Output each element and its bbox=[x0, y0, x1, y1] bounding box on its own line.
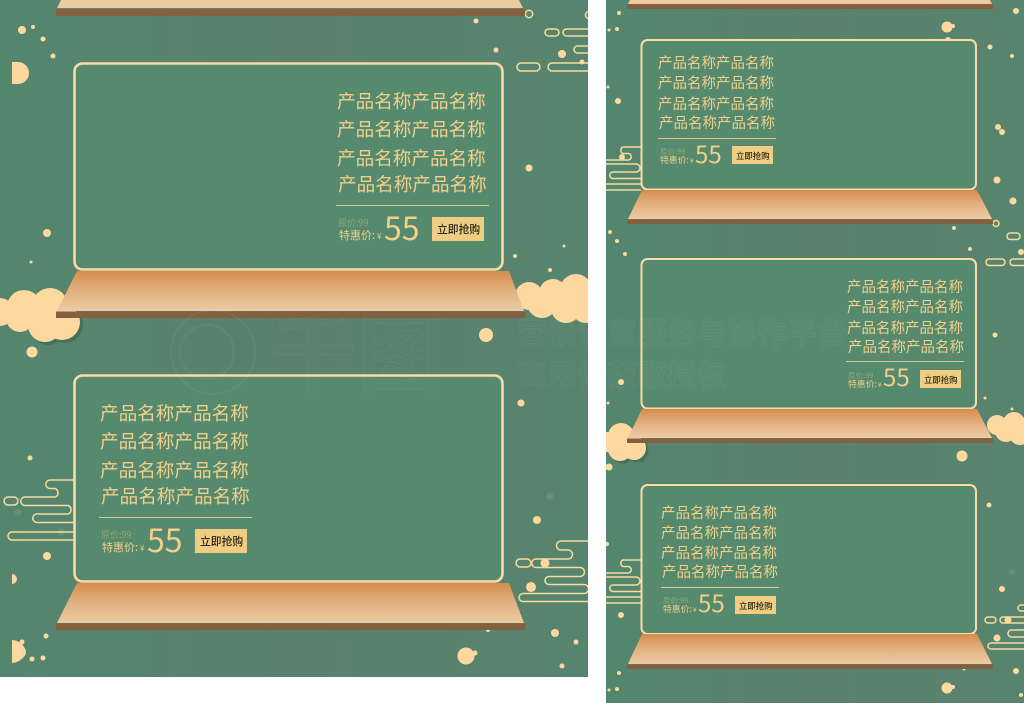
buy button: 立即抢购 bbox=[736, 150, 770, 162]
buy button: 立即抢购 bbox=[739, 600, 772, 612]
price bbox=[338, 204, 420, 250]
price: 55 bbox=[147, 516, 183, 562]
product panel: left poster upper bbox=[74, 64, 502, 270]
shelf: left poster bottom bbox=[56, 583, 525, 630]
left poster background bbox=[0, 0, 588, 677]
product panel: right poster lower bbox=[642, 485, 976, 634]
cloud: left poster right bbox=[516, 274, 588, 323]
product name: 产品名称产品名称 bbox=[100, 456, 249, 483]
price: 特惠价: bbox=[339, 227, 375, 243]
shelf: right poster bottom bbox=[627, 634, 993, 669]
price: ¥ bbox=[140, 543, 145, 554]
price: 原价:99 bbox=[660, 146, 685, 157]
buy button: 立即抢购 bbox=[200, 533, 243, 549]
cloud lines: right poster upper right bbox=[986, 220, 1024, 266]
product name: 产品名称产品名称 bbox=[661, 542, 777, 563]
product name: 产品名称产品名称 bbox=[658, 52, 774, 73]
price bbox=[660, 135, 722, 170]
watermark bbox=[171, 284, 847, 409]
product name: 产品名称产品名称 bbox=[662, 561, 778, 582]
price bbox=[101, 516, 183, 562]
price: 原价:99 bbox=[663, 595, 688, 606]
buy button bbox=[195, 529, 247, 553]
price: 特惠价: bbox=[660, 153, 689, 166]
product panel: left poster lower bbox=[74, 376, 502, 582]
cloud: right poster right bbox=[987, 412, 1024, 445]
product name: 产品名称产品名称 bbox=[101, 482, 250, 509]
cloud lines: right poster lower right bbox=[985, 605, 1024, 649]
watermark: 商用请获取授权 bbox=[517, 351, 727, 395]
product name bbox=[337, 87, 487, 197]
product name: 产品名称产品名称 bbox=[847, 317, 963, 338]
product name: 产品名称产品名称 bbox=[337, 115, 486, 142]
buy button bbox=[735, 596, 776, 614]
product name: 产品名称产品名称 bbox=[661, 502, 777, 523]
product panel: right poster upper bbox=[642, 40, 976, 190]
product name: 产品名称产品名称 bbox=[658, 93, 774, 114]
buy button bbox=[920, 370, 961, 388]
price: ¥ bbox=[878, 379, 882, 389]
product name: 产品名称产品名称 bbox=[100, 427, 249, 454]
shelf: right poster upper bbox=[627, 190, 993, 224]
product name: 产品名称产品名称 bbox=[337, 87, 486, 114]
product name bbox=[661, 502, 778, 582]
price: ¥ bbox=[690, 155, 694, 165]
product name: 产品名称产品名称 bbox=[100, 399, 249, 426]
product name: 产品名称产品名称 bbox=[338, 170, 487, 197]
product name: 产品名称产品名称 bbox=[848, 336, 964, 357]
product name bbox=[847, 276, 964, 357]
shelf: left poster top bbox=[56, 0, 525, 16]
cloud lines: left poster top right bbox=[516, 10, 588, 72]
cloud lines: left poster lower left bbox=[4, 480, 74, 540]
right poster decorative dots bbox=[605, 8, 1024, 697]
product name: 产品名称产品名称 bbox=[337, 144, 486, 171]
shelf: left poster middle bbox=[56, 271, 525, 318]
product name bbox=[658, 52, 775, 133]
price: 特惠价: bbox=[848, 377, 877, 390]
watermark: 图 bbox=[358, 284, 444, 409]
cloud: right poster left bbox=[606, 423, 648, 464]
buy button bbox=[732, 146, 773, 164]
right poster background bbox=[606, 0, 1024, 703]
product name: 产品名称产品名称 bbox=[847, 276, 963, 297]
buy button bbox=[432, 217, 484, 241]
cloud: left poster left bbox=[0, 288, 83, 345]
price: 55 bbox=[695, 135, 722, 170]
product name: 产品名称产品名称 bbox=[661, 522, 777, 543]
price: 特惠价: bbox=[102, 539, 138, 555]
price: ¥ bbox=[693, 604, 697, 614]
cloud lines: left poster lower right bbox=[516, 541, 589, 602]
cloud lines: right poster upper left bbox=[606, 147, 641, 190]
price: 55 bbox=[883, 358, 910, 393]
product name bbox=[100, 399, 250, 509]
price: 55 bbox=[698, 584, 725, 619]
price: 原价:99 bbox=[338, 216, 368, 229]
shelf: right poster middle bbox=[627, 409, 993, 443]
price: ¥ bbox=[377, 231, 382, 242]
price: 特惠价: bbox=[663, 602, 692, 615]
price: 原价:99 bbox=[848, 370, 873, 381]
watermark: 营销创意服务与协作平台 bbox=[517, 309, 847, 353]
price bbox=[663, 584, 725, 619]
product panel: right poster middle bbox=[642, 259, 976, 408]
product name: 产品名称产品名称 bbox=[659, 112, 775, 133]
price bbox=[848, 358, 910, 393]
cloud lines: right poster lower left bbox=[606, 560, 641, 603]
product name: 产品名称产品名称 bbox=[658, 72, 774, 93]
shelf: right poster top bbox=[627, 0, 993, 9]
left poster decorative dots bbox=[12, 18, 584, 668]
price: 原价:99 bbox=[101, 528, 132, 541]
buy button: 立即抢购 bbox=[924, 374, 958, 386]
price: 55 bbox=[384, 204, 420, 250]
buy button: 立即抢购 bbox=[437, 221, 480, 237]
product name: 产品名称产品名称 bbox=[847, 296, 963, 317]
watermark: 千 bbox=[270, 284, 356, 409]
